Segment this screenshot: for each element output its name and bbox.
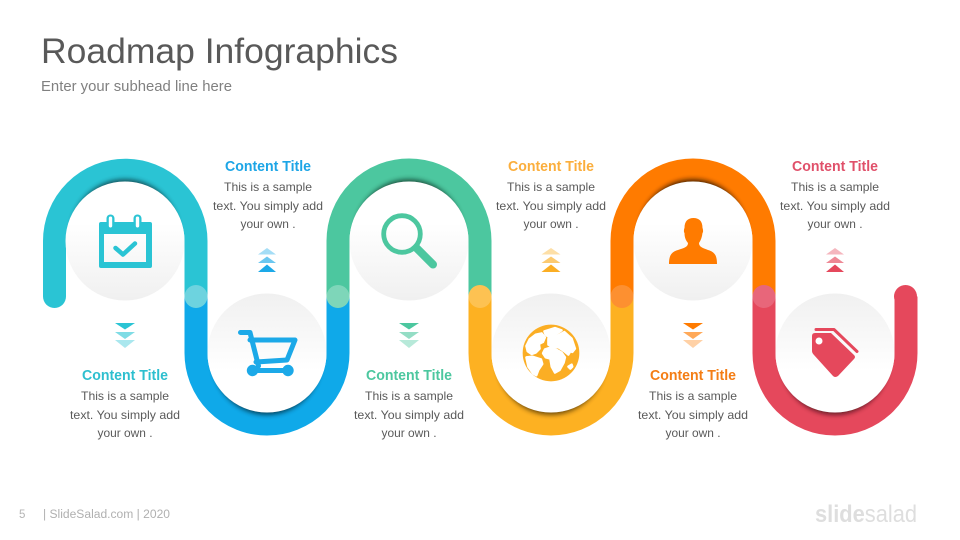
text block: your own . (808, 217, 862, 231)
inner shadow (636, 176, 750, 222)
chevrons: down (115, 323, 135, 348)
text block: Content Title (508, 159, 594, 175)
track segment: cyan (54, 170, 196, 296)
text block (780, 159, 890, 231)
text block (213, 159, 323, 231)
track segment: red (764, 296, 906, 424)
circle (776, 294, 894, 412)
chevrons: down (399, 323, 419, 348)
track segment: blue (196, 296, 338, 424)
panel: step 4 (480, 159, 622, 424)
text block: Content Title (82, 368, 168, 384)
subhead: Enter your subhead line here (41, 79, 232, 95)
circle (492, 294, 610, 412)
icon: magnifier (384, 216, 433, 264)
text block (354, 368, 464, 440)
icon: tag (812, 330, 857, 377)
icon: globe (523, 325, 579, 381)
text block: text. You simply add (354, 408, 464, 422)
text block: text. You simply add (70, 408, 180, 422)
circle (350, 182, 468, 300)
text block: This is a sample (224, 180, 312, 194)
inner shadow (496, 376, 606, 418)
circle (66, 182, 184, 300)
chevrons: down (683, 323, 703, 348)
text block: This is a sample (649, 389, 737, 403)
text block: This is a sample (81, 389, 169, 403)
track segment: orange (622, 170, 764, 296)
text block: Content Title (792, 159, 878, 175)
panel: step 2 (196, 159, 338, 424)
panel: step 6 (764, 159, 917, 424)
joints between segments (184, 285, 776, 308)
footer: credit: | SlideSalad.com | 2020 (43, 509, 170, 521)
text block: This is a sample (365, 389, 453, 403)
icon: cart (240, 332, 295, 374)
title: Roadmap Infographics (41, 32, 398, 71)
text block: your own . (98, 426, 152, 440)
text block: your own . (240, 217, 296, 231)
inner shadow (68, 176, 182, 222)
footer: logo: slidesalad (815, 501, 917, 528)
panel: step 1 (43, 170, 196, 440)
icon: person (669, 218, 717, 264)
text block: This is a sample (791, 180, 879, 194)
text block: Content Title (366, 368, 452, 384)
text block: Content Title (225, 159, 311, 175)
track segment: yellow (480, 296, 622, 424)
text block: Content Title (650, 368, 736, 384)
chevrons: up (542, 248, 560, 272)
chevrons: up (258, 248, 276, 272)
text block (496, 159, 606, 231)
track segment: green (338, 170, 480, 296)
text block: text. You simply add (780, 199, 890, 213)
end cap (894, 285, 917, 308)
panel: step 5 (622, 170, 764, 440)
icon: calendar (99, 214, 152, 268)
text block (638, 368, 748, 440)
text block: text. You simply add (496, 199, 606, 213)
text block: text. You simply add (213, 199, 323, 213)
text block: text. You simply add (638, 408, 748, 422)
text block: your own . (382, 426, 436, 440)
circle (634, 182, 752, 300)
text block: your own . (666, 426, 720, 440)
text block: your own . (524, 217, 578, 231)
inner shadow (780, 376, 890, 418)
text block: This is a sample (507, 180, 595, 194)
panel: step 3 (338, 170, 480, 440)
text block (70, 368, 180, 440)
footer: page number: 5 (19, 509, 25, 521)
inner shadow (354, 176, 465, 220)
inner shadow (210, 372, 324, 418)
circle (208, 294, 326, 412)
start cap (43, 285, 66, 308)
chevrons: up (826, 248, 844, 272)
